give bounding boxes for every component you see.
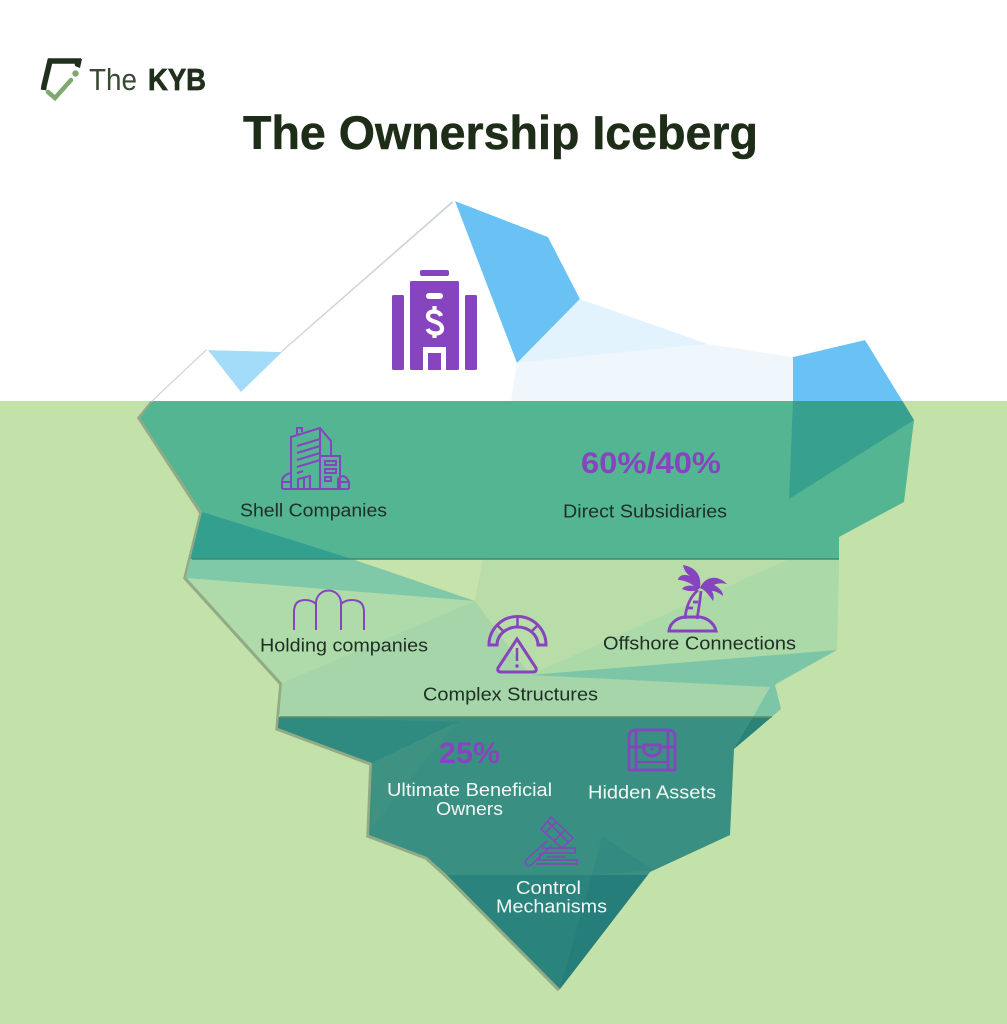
facet: pale ridge [517,299,708,363]
icon: bank building [392,270,477,370]
label: hidden assets: Hidden Assets [588,782,716,802]
logo text: The [89,62,137,97]
icon: gavel and books [525,817,577,866]
facet: left teal wedge [185,559,475,601]
facet: right underwater shade [789,401,914,499]
band: deepest layer [447,875,648,989]
facet: tip shade [560,875,652,989]
icon: risk gauge [489,616,546,672]
layer line 1 [192,558,839,560]
label: complex structures: Complex Structures [423,684,598,704]
facet: deep left lighter [381,724,454,759]
label: offshore connections: Offshore Connections [603,634,796,654]
logo check [48,80,71,98]
label: ultimate beneficial owners [387,780,552,819]
iceberg edge shadow below water [139,402,559,990]
facet: deep left dark [278,717,460,763]
logo shield [44,61,81,90]
icon: treasure chest [629,730,675,770]
stat: 60%/40%: 60%/40% [581,447,721,480]
band: middle layer [130,559,850,717]
label: direct subsidiaries: Direct Subsidiaries [563,502,727,522]
label: shell companies: Shell Companies [240,500,387,520]
label: control mechanisms [496,878,607,916]
facet: left dark wedge [190,512,352,559]
logo [44,59,206,98]
facet: left mid [186,578,475,683]
label: ultimate beneficial owners: Ultimate Beneficial [387,780,552,800]
icon: palm island [669,565,727,631]
facet: right mid [530,559,840,675]
label: holding companies: Holding companies [260,636,428,656]
facet: peak shade [455,201,580,363]
band: shallow layer [130,401,930,559]
icon: shell companies building [282,428,349,489]
logo dot [72,70,79,77]
facet: right teal sliver [530,650,837,687]
label: control mechanisms: Mechanisms [496,896,607,916]
iceberg ridge line above water [152,202,453,402]
facet: upper light [352,559,483,601]
iceberg [130,195,930,995]
facet: dark corner [734,717,772,749]
label: ultimate beneficial owners: Owners [436,799,503,819]
facet: right shoulder [793,340,904,401]
facet: upper centre [475,559,790,675]
facet: teal corner [753,684,782,717]
facet: small notch [208,350,282,392]
label: control mechanisms: Control [516,878,581,898]
layer line 2 [280,716,772,718]
facet: pale shelf [511,344,793,401]
icon: holding arches [294,590,364,630]
band: deep layer [278,717,771,875]
facet: deep right [592,836,653,875]
title: The Ownership Iceberg [243,106,758,159]
logo text bold: KYB [148,62,206,97]
above water surface [153,202,454,401]
stat: 25%: 25% [439,737,500,770]
logo shield tab [74,59,82,68]
